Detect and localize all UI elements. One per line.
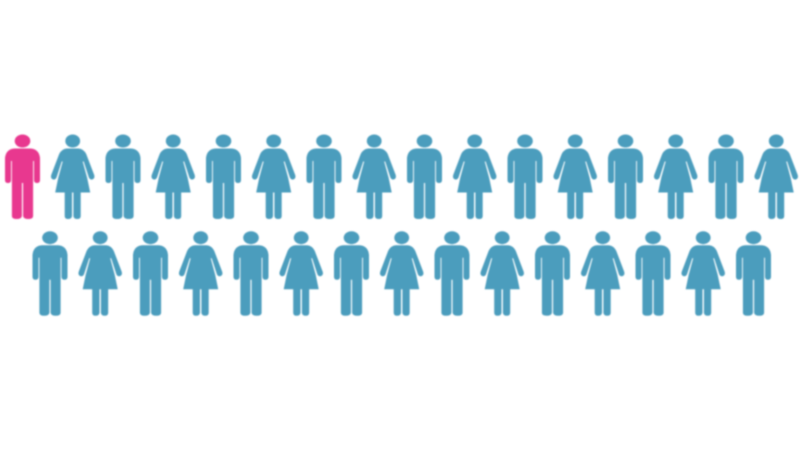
icon: woman xyxy=(279,231,323,316)
row 1 of people xyxy=(5,134,798,219)
icon: man xyxy=(234,231,268,316)
icon: man xyxy=(306,134,342,219)
icon: man xyxy=(206,134,241,219)
icon: woman xyxy=(179,231,222,316)
icon: woman xyxy=(151,134,195,219)
icon: man xyxy=(535,231,570,316)
icon: woman xyxy=(581,231,624,316)
icon: man xyxy=(106,134,140,219)
icon: woman xyxy=(553,134,597,219)
icon: man xyxy=(708,134,744,219)
icon: woman xyxy=(654,134,697,219)
icon: highlighted man xyxy=(5,134,40,219)
icon: woman xyxy=(78,231,122,316)
icon: man xyxy=(334,231,369,316)
icon: man xyxy=(508,134,542,219)
icon: man xyxy=(736,231,771,316)
icon: woman xyxy=(480,231,524,316)
icon: man xyxy=(133,231,168,316)
icon: man xyxy=(636,231,670,316)
row 2 of people xyxy=(32,231,771,316)
icon: man xyxy=(32,231,68,316)
icon: woman xyxy=(252,134,295,219)
icon: woman xyxy=(51,134,94,219)
icon: man xyxy=(608,134,643,219)
icon: woman xyxy=(352,134,396,219)
icon: man xyxy=(407,134,442,219)
icon: man xyxy=(434,231,470,316)
icon: woman xyxy=(453,134,496,219)
icon: woman xyxy=(380,231,423,316)
icon: woman xyxy=(681,231,725,316)
icon: woman xyxy=(754,134,798,219)
